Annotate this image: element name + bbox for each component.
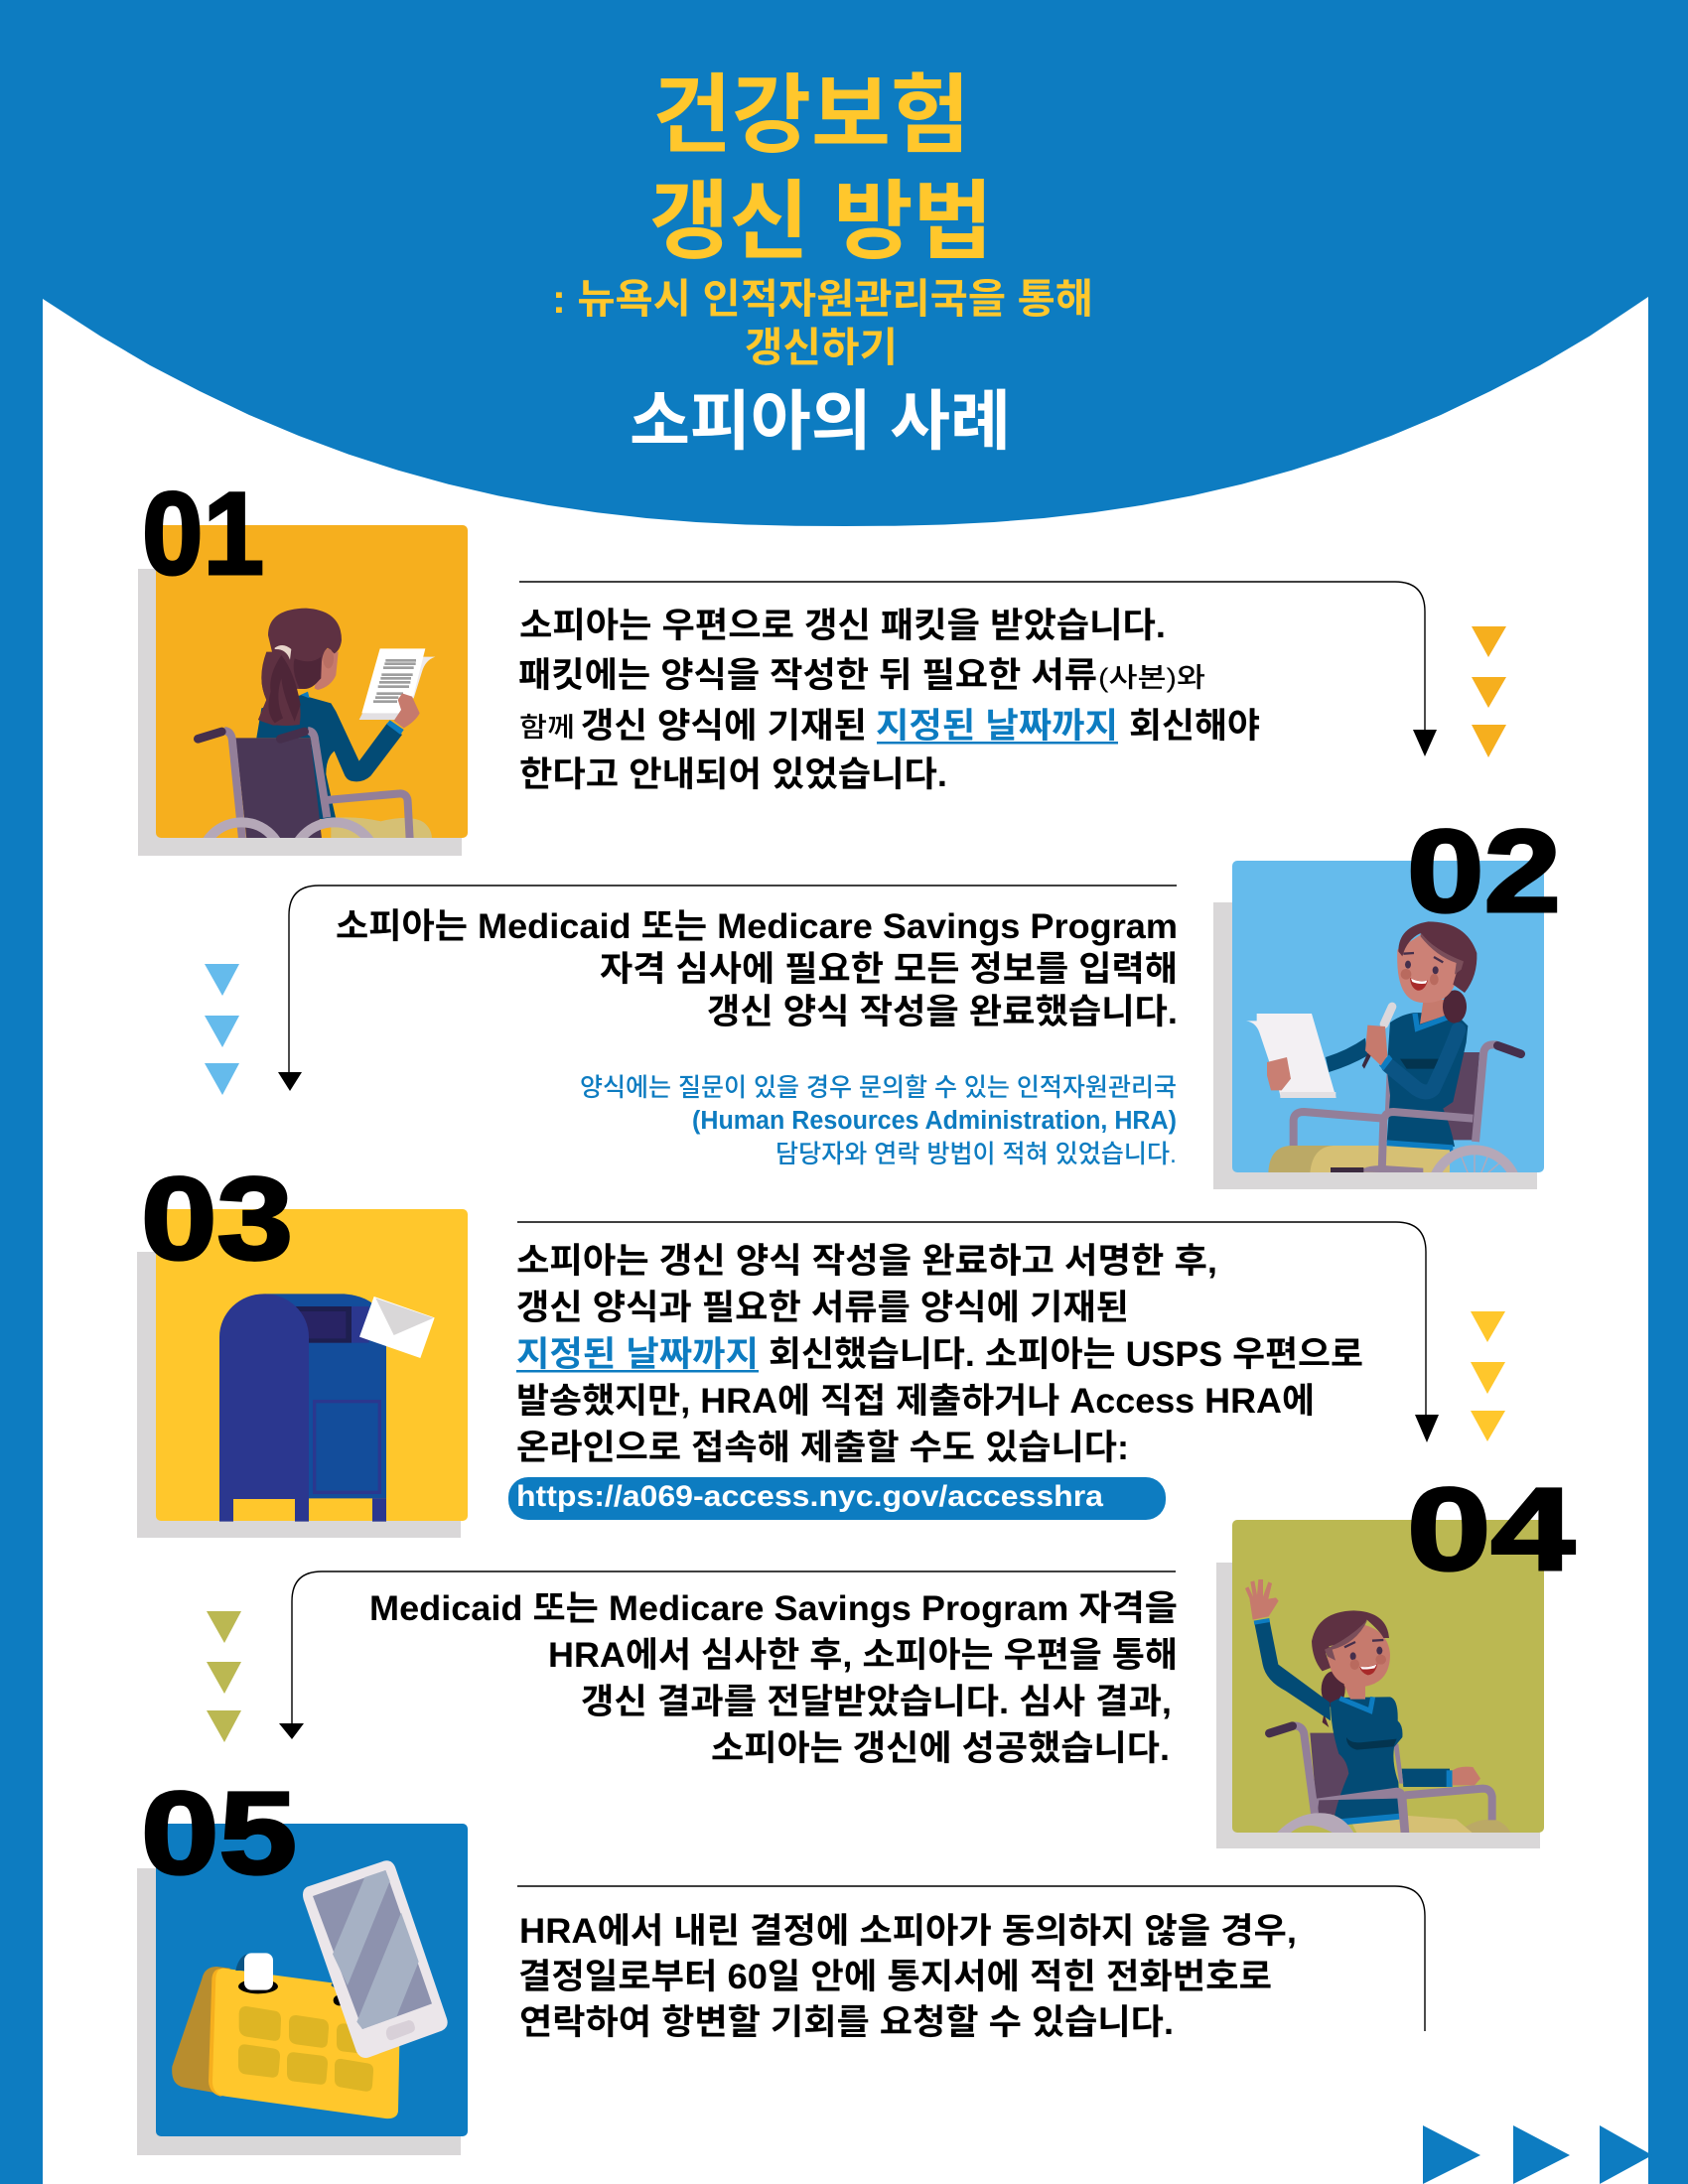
number 05: 05 (141, 1768, 297, 1899)
step 5 text: 결정일로부터 60일 안에 통지서에 적힌 전화번호로 (518, 1958, 1272, 1996)
title block (552, 68, 1093, 458)
step 3 text (516, 1242, 1363, 1467)
step 4 triangles (207, 1611, 241, 1742)
step 2 note: 담당자와 연락 방법이 적혀 있었습니다. (775, 1141, 1177, 1168)
url pill (508, 1477, 1166, 1520)
illustration: woman filling out form (1246, 921, 1525, 1172)
step 2 note: (Human Resources Administration, HRA) (692, 1107, 1177, 1135)
step 1 text: 한다고 안내되어 있었습니다. (519, 755, 947, 794)
step 5 text (518, 1912, 1297, 2042)
step 4 connector arrow (279, 1571, 1176, 1739)
number 01: 01 (142, 469, 264, 600)
step 3 text: 지정된 날짜까지 (516, 1335, 759, 1374)
card shadow 4 (1216, 1563, 1540, 1848)
subtitle line 2: 갱신하기 (745, 325, 898, 370)
step 1 text: 패킷에는 양식을 작성한 뒤 필요한 서류 (518, 656, 1097, 695)
card 2 (1232, 861, 1544, 1172)
step 2 note (580, 1074, 1177, 1168)
url pill: https://a069-access.nyc.gov/accesshra (516, 1480, 1103, 1513)
number 04: 04 (1407, 1464, 1575, 1595)
illustration: mailbox with envelope (219, 1294, 435, 1522)
step 2 connector arrow (278, 886, 1177, 1091)
card 5 (156, 1824, 468, 2136)
step 5 text: 연락하여 항변할 기회를 요청할 수 있습니다. (519, 2003, 1174, 2042)
step 3 text: 온라인으로 접속해 제출할 수도 있습니다: (516, 1429, 1129, 1467)
step 2 triangles (205, 964, 239, 1095)
step 4 text: Medicaid 또는 Medicare Savings Program 자격을 (369, 1589, 1178, 1628)
step 3 text: 발송했지만, HRA에 직접 제출하거나 Access HRA에 (516, 1382, 1315, 1421)
step 5 open connector line (517, 1886, 1425, 2031)
step 3 text: 갱신 양식과 필요한 서류를 양식에 기재된 (516, 1289, 1129, 1327)
step 3 connector arrow (517, 1222, 1439, 1442)
step 3 text: 소피아는 갱신 양식 작성을 완료하고 서명한 후, (516, 1242, 1217, 1281)
step 3 text: 회신했습니다. 소피아는 USPS 우편으로 (769, 1335, 1363, 1374)
step 2 text: 갱신 양식 작성을 완료했습니다. (707, 993, 1178, 1031)
next page arrows (1423, 2125, 1652, 2184)
step 1 text: 회신해야 (1129, 707, 1260, 746)
card shadow 3 (137, 1252, 461, 1538)
number 03: 03 (141, 1154, 293, 1285)
case heading: 소피아의 사례 (630, 384, 1011, 458)
step 4 text: 소피아는 갱신에 성공했습니다. (711, 1729, 1170, 1768)
illustration: woman reading letter from behind (194, 608, 435, 838)
card 1 (156, 525, 468, 838)
panel: step 4 (207, 1464, 1575, 1848)
step 2 note: 양식에는 질문이 있을 경우 문의할 수 있는 인적자원관리국 (580, 1074, 1177, 1102)
illustration: calendar and phone (172, 1860, 448, 2118)
step 1 text: (사본)와 (1098, 663, 1205, 693)
step 1 text: 갱신 양식에 기재된 (581, 707, 867, 746)
step 2 text: 소피아는 Medicaid 또는 Medicare Savings Program (336, 907, 1178, 946)
illustration: woman waving (1245, 1579, 1511, 1834)
card 3 (156, 1209, 468, 1521)
step 4 text: HRA에서 심사한 후, 소피아는 우편을 통해 (548, 1636, 1178, 1675)
step 1 connector arrow (519, 582, 1437, 756)
number 02: 02 (1407, 806, 1561, 937)
step 5 text: HRA에서 내린 결정에 소피아가 동의하지 않을 경우, (519, 1912, 1297, 1951)
panel: step 3 (137, 1154, 1505, 1538)
step 1 text: 소피아는 우편으로 갱신 패킷을 받았습니다. (519, 607, 1166, 645)
subtitle line 1: : 뉴욕시 인적자원관리국을 통해 (552, 276, 1093, 322)
panel: step 1 (138, 490, 1506, 856)
panel: step 2 (205, 828, 1557, 1189)
step 2 text (336, 907, 1178, 1031)
card shadow 5 (137, 1868, 461, 2155)
title line 1: 건강보험 (652, 68, 970, 164)
step 1 text: 지정된 날짜까지 (876, 707, 1118, 746)
step 1 text: 함께 (519, 713, 575, 743)
step 3 triangles (1471, 1311, 1505, 1441)
blue header curve (43, 0, 1648, 526)
step 4 text: 갱신 결과를 전달받았습니다. 심사 결과, (581, 1683, 1172, 1721)
step 4 text (369, 1589, 1178, 1768)
panel: step 5 (137, 1768, 1425, 2155)
step 2 text: 자격 심사에 필요한 모든 정보를 입력해 (600, 950, 1178, 989)
card shadow 2 (1213, 902, 1537, 1189)
step 1 triangles (1472, 626, 1506, 757)
step 1 text (518, 607, 1260, 794)
title line 2: 갱신 방법 (649, 174, 993, 270)
card shadow 1 (138, 569, 462, 856)
card 4 (1232, 1520, 1544, 1833)
